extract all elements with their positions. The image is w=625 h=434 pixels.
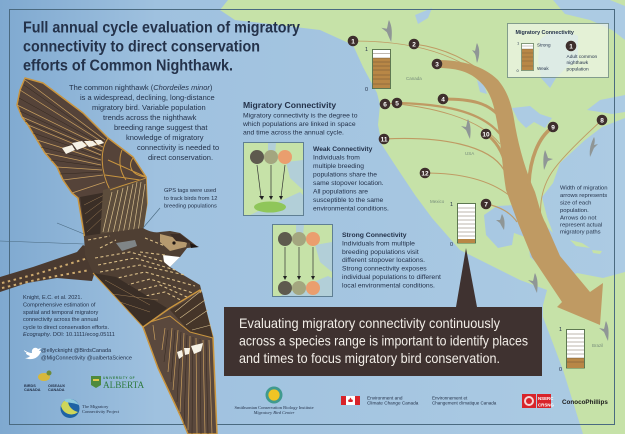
text: strong connectivity: Strong Connectivity [342, 232, 407, 239]
title [23, 20, 300, 74]
legend [508, 24, 608, 78]
speckled back [100, 178, 147, 240]
citation: connectivity across the annual [23, 317, 98, 323]
map labels: Brazil [592, 343, 603, 348]
social handles [41, 348, 132, 362]
GPS note: GPS tags were used [164, 188, 216, 194]
upper wing [17, 78, 147, 240]
callout: and times to focus migratory bird conservation. [239, 350, 500, 366]
logo: Birds Canada: CANADA [24, 388, 41, 392]
map labels: Canada [406, 76, 422, 81]
arrow: population 11 [384, 138, 504, 170]
intro text: trends across the nighthawk [103, 113, 197, 122]
text: strong connectivity: different stopover locations. [342, 257, 425, 264]
citation: Comprehensive estimation of [23, 302, 96, 308]
arrows to shared stopover [257, 165, 285, 200]
marker 10 [481, 129, 491, 139]
callout: Evaluating migratory connectivity continuously [239, 315, 500, 331]
marker 10: 10 [482, 131, 490, 138]
population circles [250, 150, 292, 164]
arrow width note: size of each [560, 200, 591, 206]
legend marker: Adult common [566, 54, 597, 60]
primaries [17, 78, 147, 240]
social handles: @ellycknight @BirdsCanada [41, 348, 112, 354]
lower wing [143, 290, 217, 434]
connectivity bar chart: Mexico: 0 [450, 242, 453, 248]
arrow: population 12 [425, 173, 510, 196]
stopover circles [278, 281, 320, 295]
marker 6: 6 [383, 101, 387, 108]
arrow: population 10 [486, 134, 506, 166]
tail [0, 245, 100, 292]
logo: Migratory Connectivity Project: The Migratory [82, 404, 109, 409]
marker 1 [348, 36, 358, 46]
intro text: migratory bird. Variable population [92, 103, 206, 112]
logo: NSERC CRSNG [522, 394, 554, 408]
arrow: population 9 [529, 127, 553, 216]
text: strong connectivity: Individuals from multiple [342, 240, 415, 248]
map: the Americas [220, 0, 625, 434]
marker 8: 8 [600, 117, 604, 124]
marker 7: 7 [484, 201, 488, 208]
marker 6 [380, 99, 390, 109]
panel: weak connectivity diagram [244, 142, 304, 216]
connectivity bar chart: Alaska/Canada: 0 [365, 87, 368, 93]
legend bar: Strong [537, 42, 551, 48]
citation: Knight, E.C. et al. 2021. [23, 295, 83, 301]
dark inner feathers [80, 192, 107, 240]
logo: ConocoPhillips: ConocoPhillips [562, 399, 608, 406]
connectivity bar chart: Alaska/Canada: 1 [365, 47, 368, 53]
legend bar [516, 40, 551, 73]
text: weak connectivity: susceptible to the same [313, 197, 384, 204]
intro text: direct conservation. [148, 153, 213, 162]
legend marker [566, 41, 597, 72]
logo: Birds Canada: CANADA [48, 388, 65, 392]
citation: cycle to direct conservation efforts. [23, 325, 109, 331]
arrow: population 6 [385, 103, 500, 144]
logo: University of Alberta: ALBERTA [103, 380, 144, 390]
legend marker: population [566, 66, 589, 72]
logo: Birds Canada [24, 370, 66, 392]
logo: Migratory Connectivity Project: Connectivity Project [82, 409, 120, 414]
legend bar: 0 [516, 68, 520, 73]
arrow width note: arrows represents [560, 193, 607, 199]
parallel arrows [283, 247, 315, 280]
marker 9 [548, 122, 558, 132]
text: strong connectivity: Strong connectivity exposes [342, 266, 427, 272]
marker 2: 2 [412, 41, 416, 48]
shared stopover [254, 202, 286, 212]
intro text: breeding range suggest that [114, 123, 208, 132]
connectivity bar chart: South America: 1 [559, 327, 562, 333]
nighthawk illustration [0, 78, 217, 434]
arrow width note: Width of migration [560, 186, 607, 192]
citation: spatial and temporal migratory [23, 310, 98, 316]
logo: NSERC CRSNG: NSERC [538, 396, 554, 401]
logo: Smithsonian: Smithsonian Conservation Biology Institute [234, 405, 314, 410]
logo: Canada flag and ECCC wordmarks [341, 396, 497, 406]
logo: Canada flag and ECCC wordmarks: Environnement et [432, 396, 468, 400]
marker 2 [409, 39, 419, 49]
text: weak connectivity: same stopover location. [313, 180, 384, 187]
marker 8 [597, 115, 607, 125]
population markers [348, 36, 607, 209]
dark coverts band [93, 273, 167, 327]
map labels: USA [465, 151, 474, 156]
title: efforts of Common Nighthawk. [23, 58, 233, 74]
white wing patch: lower [177, 343, 203, 359]
marker 12: 12 [421, 170, 429, 177]
legend: Migratory Connectivity [516, 30, 574, 36]
GPS note [0, 188, 217, 244]
legend marker: nighthawk [566, 60, 589, 66]
legend bar: 1 [517, 40, 520, 46]
arrow: population 4 [443, 99, 502, 120]
logo: Migratory Connectivity Project [60, 399, 120, 418]
map labels: Mexico [430, 199, 445, 204]
callout: across a species range is important to identify places [239, 332, 528, 348]
arrow: population 8 [541, 120, 602, 220]
arrow width note [560, 186, 607, 236]
marker 4: 4 [441, 96, 445, 103]
text: strong connectivity: breeding populations visit [342, 249, 419, 256]
intro text: connectivity is needed to [137, 143, 219, 152]
arrow width note: migratory paths [560, 230, 601, 236]
text: weak connectivity: multiple breeding [313, 163, 364, 170]
panel: strong connectivity diagram [272, 224, 332, 296]
text: weak connectivity: All populations are [313, 188, 368, 196]
icon: twitter bird [24, 348, 41, 359]
secondary coverts [102, 138, 146, 190]
legend marker: 1 [569, 43, 573, 50]
social handles: @MigConnectivity @ualbertaScience [41, 356, 132, 362]
citation [23, 295, 115, 338]
text: weak connectivity: environmental conditions. [313, 206, 389, 212]
connectivity bar chart: Alaska/Canada [365, 47, 390, 93]
breeding circles [278, 232, 320, 246]
arrow width note: Arrows do not [560, 216, 597, 222]
title: Full annual cycle evaluation of migratory [23, 20, 300, 36]
logo: NSERC CRSNG: CRSNG [538, 402, 554, 408]
section heading: migratory connectivity: which populations are linked in space [242, 121, 356, 128]
GPS tag [116, 240, 137, 251]
text: weak connectivity [313, 146, 389, 212]
white wing patch: upper [62, 140, 104, 154]
arrow: population 7 [487, 204, 517, 222]
marker 3 [432, 59, 442, 69]
logo: University of Alberta [91, 376, 144, 390]
intro text: The common nighthawk (Chordeiles minor) [69, 83, 213, 92]
title: connectivity to direct conservation [23, 38, 260, 56]
marker 5 [392, 98, 402, 108]
section heading: migratory connectivity: Migratory connectivity is the degree to [243, 112, 358, 120]
callout [224, 248, 542, 376]
marker 9: 9 [551, 124, 555, 131]
marker 4 [438, 94, 448, 104]
connectivity bar chart: South America [559, 327, 584, 373]
logo: Canada flag and ECCC wordmarks: Climate Change Canada [367, 400, 419, 406]
arrow: population 5 [397, 103, 500, 134]
marker 12 [420, 168, 430, 178]
migration arrows [353, 41, 603, 325]
text: strong connectivity: local environmental conditions. [342, 282, 435, 290]
marker 11: 11 [381, 136, 388, 143]
logo: Birds Canada: OISEAUX [48, 384, 66, 388]
GPS note: breeding populations [164, 204, 217, 210]
section heading: migratory connectivity: Migratory Connectivity [243, 100, 336, 110]
connectivity bar chart: Mexico: 1 [450, 202, 453, 208]
arrow: population 1 [353, 41, 490, 82]
connectivity bar chart: Mexico [450, 202, 476, 248]
logo: Canada flag and ECCC wordmarks: Changement climatique Canada [432, 400, 497, 406]
section heading: migratory connectivity: and time across the annual cycle. [243, 130, 344, 136]
intro text [69, 83, 219, 162]
marker 11 [379, 134, 389, 144]
logo: Canada flag and ECCC wordmarks: Environment and [367, 396, 403, 400]
section heading: migratory connectivity [242, 100, 358, 136]
marker 1: 1 [351, 38, 355, 45]
logo: University of Alberta: UNIVERSITY OF [103, 376, 135, 380]
logo: Smithsonian: Migratory Bird Center [253, 410, 295, 415]
intro text: knowledge of migratory [126, 133, 204, 142]
text: weak connectivity: Weak Connectivity [313, 146, 373, 153]
text: strong connectivity [342, 232, 441, 290]
marker 5: 5 [395, 100, 399, 107]
logo: Smithsonian [234, 386, 314, 415]
map labels [406, 76, 603, 348]
body and head [84, 228, 213, 338]
text: weak connectivity: Individuals from [313, 154, 360, 162]
citation: Ecography. DOI: 10.1111/ecog.05111 [23, 332, 115, 338]
arrow: main trunk with population 3 [437, 60, 603, 325]
small flying bird silhouettes [381, 20, 609, 341]
arrow width note: population. [560, 208, 589, 214]
intro text: is a widespread, declining, long-distance [80, 93, 215, 102]
logo: Birds Canada: BIRDS [24, 384, 36, 388]
arrow: population 2 [414, 44, 492, 80]
text: strong connectivity: individual populations to different [342, 274, 441, 281]
marker 3: 3 [435, 61, 439, 68]
legend bar: Weak [537, 66, 549, 71]
GPS note: to track birds from 12 [164, 196, 217, 202]
connectivity bar chart: South America: 0 [559, 367, 562, 373]
arrow width note: represent actual [560, 222, 602, 228]
marker 7 [481, 199, 491, 209]
text: weak connectivity: populations share the [313, 172, 377, 178]
